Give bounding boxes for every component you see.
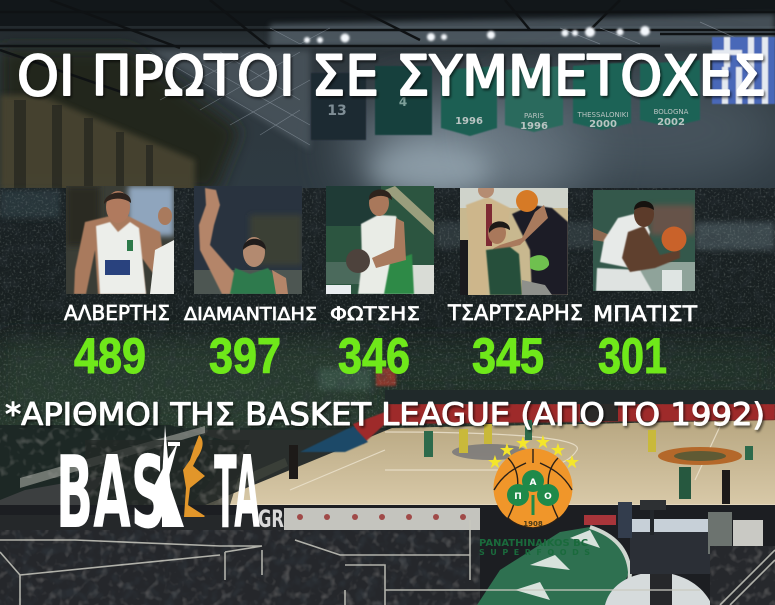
- six stars: ★: [564, 452, 580, 473]
- name: Αλβερτής: ΑΛΒΕΡΤΗΣ: [64, 301, 170, 325]
- six stars: ★: [535, 432, 551, 453]
- photo: Αλβερτής: [66, 186, 174, 294]
- logo: Panathinaikos BC: Ο: [544, 492, 552, 502]
- logo: baskaeta.gr: GR: [258, 505, 284, 533]
- panel: Φώτσης: [326, 186, 434, 384]
- logo: Panathinaikos BC: Π: [514, 492, 522, 502]
- panel: Μπατίστ: [593, 190, 697, 384]
- hanging banners: 2000: [589, 119, 617, 130]
- panel: Αλβερτής: [64, 186, 174, 384]
- greek flag: [712, 37, 775, 104]
- hanging banners: THESSALONIKI: [577, 111, 628, 119]
- six stars: [487, 432, 580, 473]
- sponsor: SUPERFOODS: [479, 548, 590, 557]
- photo: Φώτσης: [326, 186, 434, 294]
- hanging banners: PARIS: [524, 112, 545, 120]
- value: 346: 346: [338, 328, 410, 384]
- hanging banners: 13: [327, 103, 347, 119]
- name: Τσαρτσαρής: ΤΣΑΡΤΣΑΡΗΣ: [447, 301, 583, 325]
- value: 345: 345: [472, 328, 544, 384]
- founding year: 1908: [523, 520, 543, 528]
- photo: Μπατίστ: [593, 190, 695, 291]
- name: Μπατίστ: ΜΠΑΤΙΣΤ: [593, 302, 697, 326]
- six stars: ★: [499, 440, 515, 461]
- courtside seats and lower crowd: [0, 500, 775, 605]
- hanging banners: [311, 60, 700, 140]
- crowd stands: [0, 188, 775, 430]
- arena lights: [304, 26, 650, 43]
- logo: baskaeta.gr: BAS: [56, 434, 166, 551]
- six stars: ★: [515, 433, 531, 454]
- photo: Τσαρτσαρής: [460, 182, 568, 295]
- photo: Διαμαντίδης: [194, 186, 302, 294]
- value: 397: 397: [209, 328, 281, 384]
- footnote: *ΑΡΙΘΜΟΙ ΤΗΣ BASKET LEAGUE (ΑΠΟ ΤΟ 1992): [5, 397, 765, 433]
- hanging banners: 4: [399, 95, 407, 109]
- hanging banners: 2002: [657, 117, 685, 128]
- club name: PANATHINAIKOS BC: [479, 538, 588, 549]
- arena ceiling and hall: [0, 0, 775, 205]
- court floor: [0, 390, 775, 515]
- title: ΟΙ ΠΡΩΤΟΙ ΣΕ ΣΥΜΜΕΤΟΧΕΣ: [17, 44, 766, 108]
- logo: baskaeta.gr: TA: [214, 434, 260, 551]
- name: Φώτσης: ΦΩΤΣΗΣ: [330, 303, 420, 325]
- six stars: ★: [550, 440, 566, 461]
- hanging banners: 1996: [520, 121, 548, 132]
- logo: Panathinaikos BC: [479, 432, 590, 557]
- value: 489: 489: [74, 328, 146, 384]
- green clover: [507, 470, 559, 515]
- logo: Panathinaikos BC: Α: [530, 478, 537, 488]
- name: Διαμαντίδης: ΔΙΑΜΑΝΤΙΔΗΣ: [184, 304, 317, 325]
- hanging banners: 1996: [455, 116, 483, 127]
- six stars: ★: [487, 452, 503, 473]
- panel: Τσαρτσαρής: [447, 182, 583, 384]
- orange basketball: [494, 448, 572, 528]
- hanging banners: BOLOGNA: [654, 108, 689, 116]
- value: 301: 301: [598, 328, 667, 384]
- panel: Διαμαντίδης: [184, 186, 317, 384]
- left railings over crowd: [0, 425, 250, 505]
